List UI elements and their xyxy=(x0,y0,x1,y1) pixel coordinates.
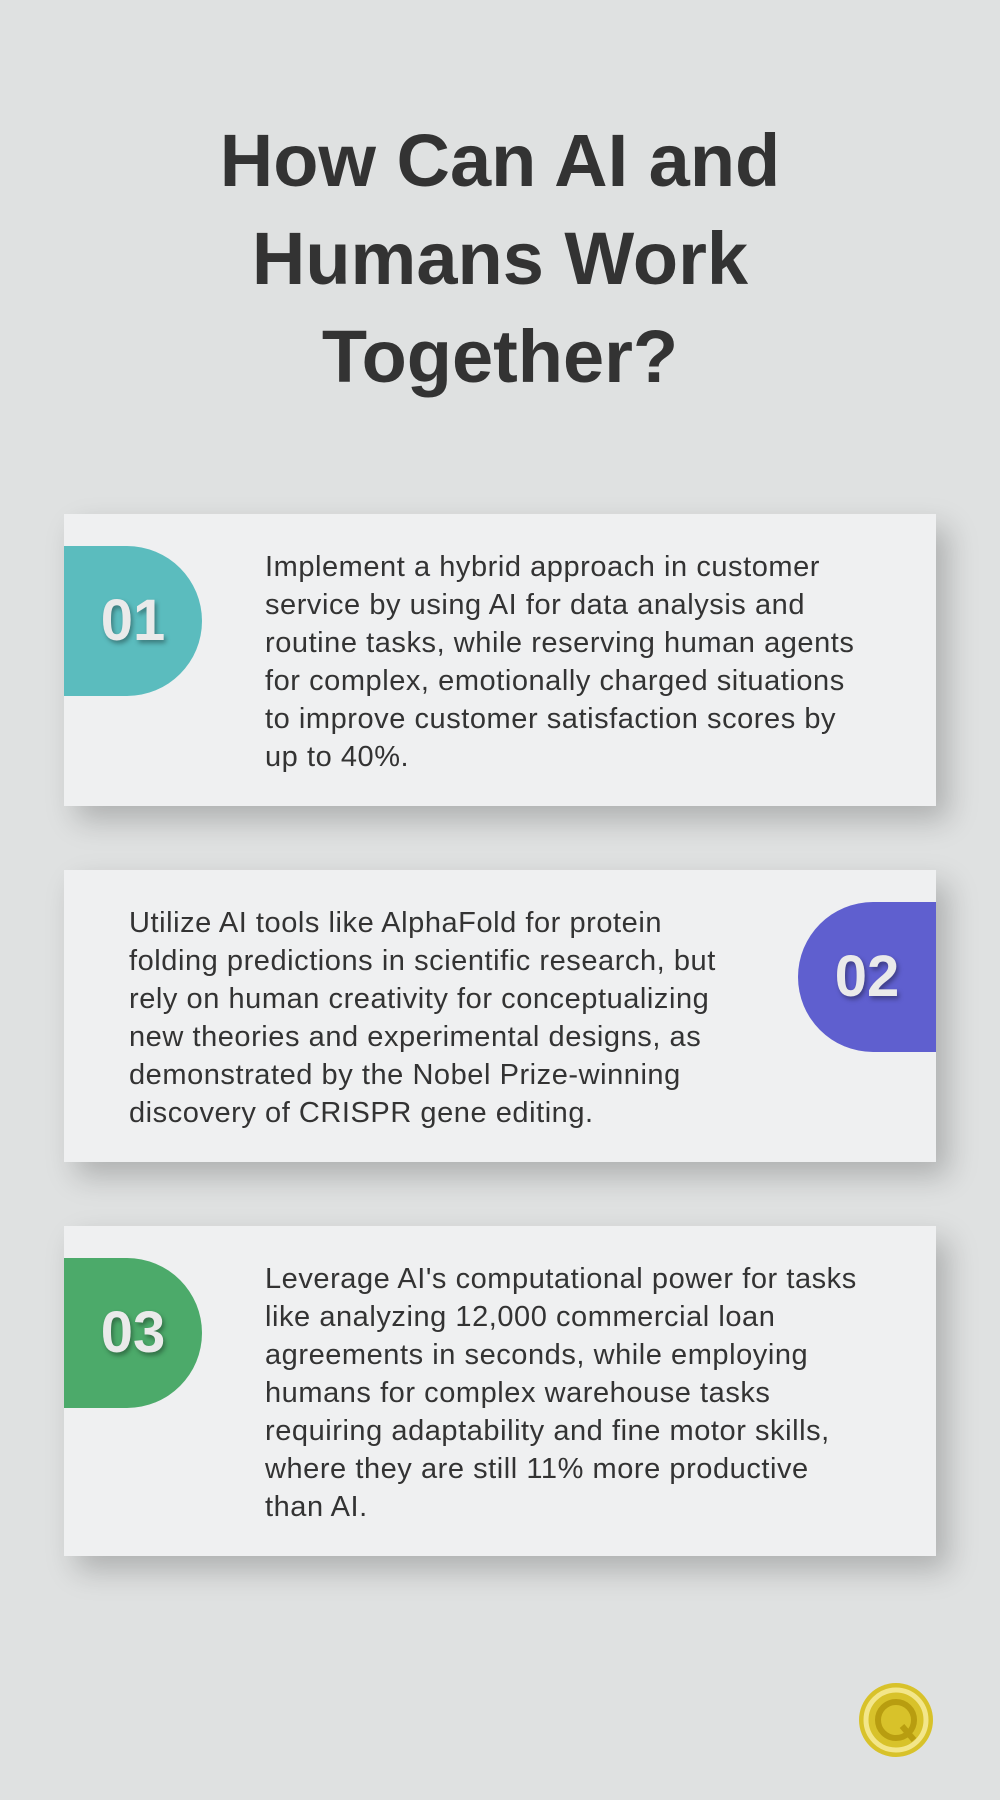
text block 03: requiring adaptability and fine motor skills, xyxy=(265,1415,830,1447)
text block 02: rely on human creativity for conceptualizing xyxy=(129,983,709,1015)
text block 03: humans for complex warehouse tasks xyxy=(265,1377,770,1409)
text block 02 xyxy=(129,907,716,1129)
title: Humans Work xyxy=(252,217,748,300)
badge 01: 01 xyxy=(101,588,165,653)
text block 03: like analyzing 12,000 commercial loan xyxy=(265,1301,775,1333)
icon: logo xyxy=(859,1683,933,1757)
title: How Can AI and xyxy=(220,119,780,202)
badge 03 xyxy=(64,1258,202,1408)
text block 02: demonstrated by the Nobel Prize-winning xyxy=(129,1059,681,1091)
badge 02 xyxy=(798,902,936,1052)
text block 01: for complex, emotionally charged situations xyxy=(265,665,845,697)
text block 01: up to 40%. xyxy=(265,741,409,773)
text block 03: Leverage AI's computational power for tasks xyxy=(265,1263,857,1295)
text block 02: discovery of CRISPR gene editing. xyxy=(129,1097,594,1129)
text block 03: agreements in seconds, while employing xyxy=(265,1339,808,1371)
badge 01 xyxy=(64,546,202,696)
text block 01: routine tasks, while reserving human agents xyxy=(265,627,854,659)
text block 03 xyxy=(265,1263,857,1523)
text block 02: new theories and experimental designs, as xyxy=(129,1021,701,1053)
text block 03: where they are still 11% more productive xyxy=(265,1453,809,1485)
panel: card 01 xyxy=(64,514,936,806)
panel: card 03 xyxy=(64,1226,936,1556)
badge 02: 02 xyxy=(835,944,899,1009)
text block 01 xyxy=(265,551,854,773)
text block 03: than AI. xyxy=(265,1491,368,1523)
title: Together? xyxy=(322,315,678,398)
badge 03: 03 xyxy=(101,1300,165,1365)
title xyxy=(220,119,780,398)
text block 02: Utilize AI tools like AlphaFold for protein xyxy=(129,907,662,939)
text block 01: service by using AI for data analysis and xyxy=(265,589,805,621)
text block 02: folding predictions in scientific research, but xyxy=(129,945,716,977)
text block 01: Implement a hybrid approach in customer xyxy=(265,551,820,583)
text block 01: to improve customer satisfaction scores by xyxy=(265,703,836,735)
panel: card 02 xyxy=(64,870,936,1162)
